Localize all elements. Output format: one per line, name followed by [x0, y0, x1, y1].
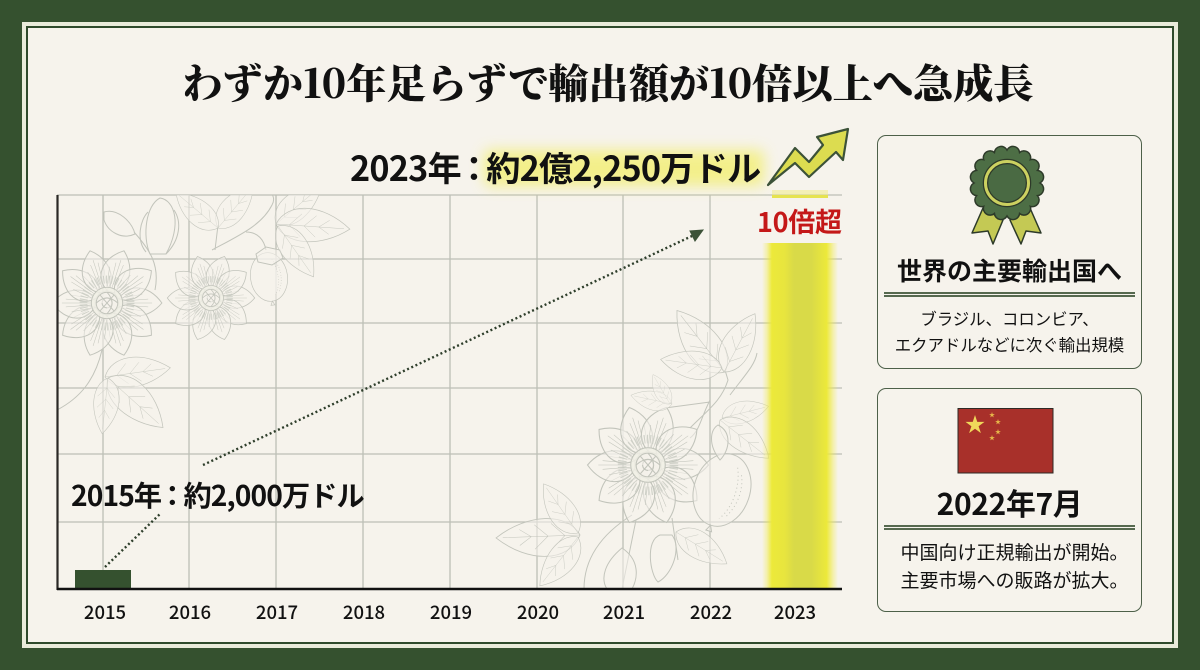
x-axis year labels: 2021 — [603, 599, 645, 625]
icon: China flag — [958, 408, 1053, 473]
text: China market description: 主要市場への販路が拡大。 — [900, 566, 1128, 593]
panel: world exporter — [877, 135, 1142, 369]
2015 bar — [75, 570, 131, 589]
panel: China market — [877, 388, 1142, 612]
icon: medal — [970, 146, 1044, 244]
chart — [56, 128, 1054, 590]
x-axis year labels: 2016 — [169, 599, 211, 625]
x-axis year labels: 2020 — [517, 599, 559, 625]
botanical illustration: lower right passion flower and fruit — [495, 300, 778, 595]
x-axis year labels: 2018 — [343, 599, 385, 625]
text: China market description — [900, 538, 1128, 593]
x-axis year labels: 2019 — [430, 599, 472, 625]
x-axis year labels — [84, 599, 816, 625]
heading: world exporter: 世界の主要輸出国へ — [897, 252, 1122, 288]
2023 highlighted bar — [762, 190, 838, 589]
dotted growth arrow — [105, 230, 703, 567]
callout: 2023 value: 2023年：約2億2,250万ドル — [350, 141, 760, 191]
botanical illustration: upper left passion flowers — [58, 195, 350, 434]
heading: July 2022: 2022年7月 — [937, 480, 1082, 524]
callout: 2015 value: 2015年：約2,000万ドル — [71, 474, 364, 515]
grid lines — [57, 195, 842, 589]
text: China market description: 中国向け正規輸出が開始。 — [900, 538, 1128, 565]
title: わずか10年足らずで輸出額が10倍以上へ急成長 — [182, 53, 1034, 110]
x-axis year labels: 2017 — [256, 599, 298, 625]
text: exporter description — [895, 306, 1124, 356]
axes — [57, 195, 842, 590]
text: exporter description: エクアドルなどに次ぐ輸出規模 — [895, 332, 1124, 356]
x-axis year labels: 2022 — [690, 599, 732, 625]
text: exporter description: ブラジル、コロンビア、 — [920, 306, 1099, 330]
callout: 10x label: 10倍超 — [757, 201, 842, 240]
x-axis year labels: 2023 — [774, 599, 816, 625]
x-axis year labels: 2015 — [84, 599, 126, 625]
highlight behind 2023 value — [484, 150, 764, 186]
icon: rising zigzag arrow — [768, 129, 848, 185]
